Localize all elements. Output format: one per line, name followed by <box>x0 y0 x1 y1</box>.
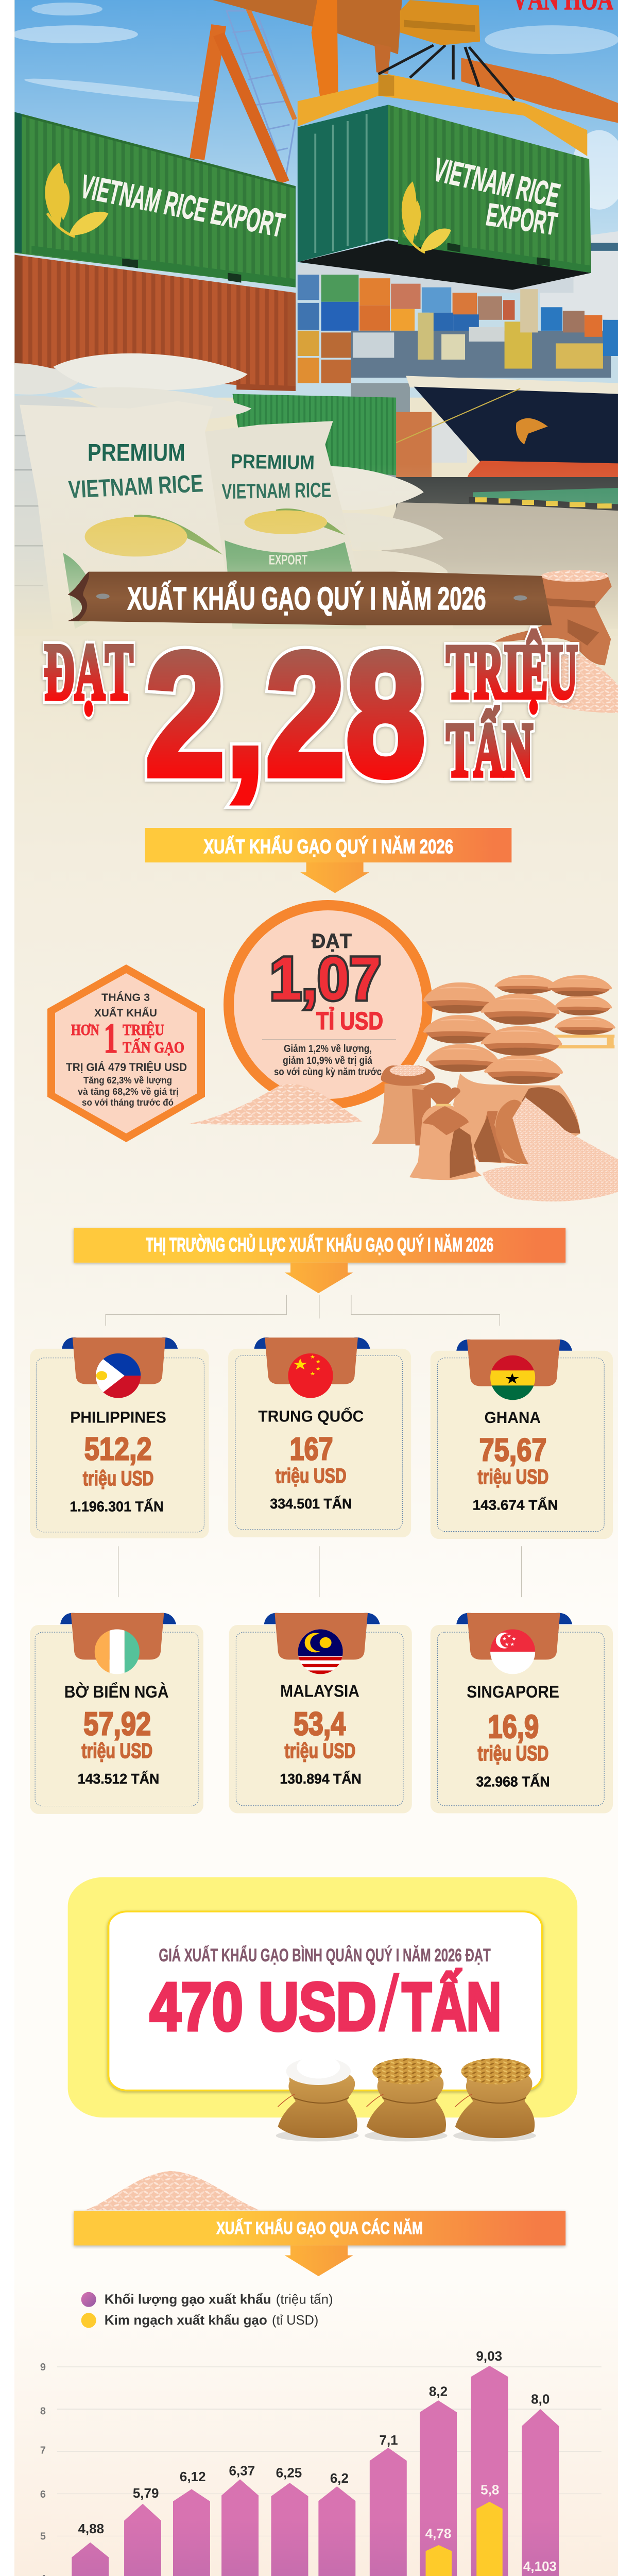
tied sack <box>409 1104 482 1180</box>
icon: gold rice leaf <box>402 181 451 252</box>
container stack left <box>14 112 296 391</box>
flag: Singapore: ★ <box>505 1642 509 1648</box>
bar chart: 9 <box>40 2362 46 2373</box>
circle: value 1.07 billion USD: TỈ USD <box>316 1007 383 1035</box>
big number headline: 2,28 <box>145 616 426 812</box>
card: Philippines: triệu USD <box>83 1467 153 1490</box>
flag: Ghana <box>490 1355 535 1401</box>
hero photo: rice containers at port <box>12 0 618 629</box>
card: Singapore: triệu USD <box>478 1742 548 1766</box>
flag: Philippines <box>96 1353 141 1398</box>
bar chart: 6,37 <box>229 2463 255 2479</box>
card: Singapore: 16,9 <box>488 1708 539 1744</box>
card: Ivory Coast: 143.512 TẤN <box>78 1770 159 1787</box>
bar chart: 9,03 <box>476 2348 502 2364</box>
flag: Ivory Coast <box>95 1629 140 1674</box>
legend <box>81 2292 333 2328</box>
flag: Ghana: ★ <box>505 1370 520 1387</box>
section heading: yearly exports: XUẤT KHẨU GẠO QUA CÁC NĂM <box>216 2218 423 2238</box>
stacked sacks <box>423 975 615 1084</box>
section heading: key markets <box>74 1228 565 1293</box>
card: Philippines: PHILIPPINES <box>70 1409 166 1427</box>
card: Philippines: 1.196.301 TẤN <box>70 1498 164 1515</box>
flag: China <box>288 1353 333 1398</box>
markets section, row 1 <box>30 1228 613 1597</box>
card: China: triệu USD <box>276 1465 347 1487</box>
bar chart: 4,78 <box>425 2526 451 2541</box>
panel: average price: 470 USD <box>150 1969 376 2045</box>
hexagon: March exports: HƠN <box>71 1021 99 1039</box>
section heading: yearly exports <box>74 2211 565 2276</box>
legend: (triệu tấn) <box>276 2292 333 2307</box>
card: Ghana: 75,67 <box>479 1432 546 1468</box>
icon: rice sacks <box>276 2056 536 2141</box>
big number headline: ĐẠT <box>44 628 133 717</box>
circle: value 1.07 billion USD: so với cùng kỳ năm trước <box>274 1066 382 1078</box>
rice sack top right <box>494 570 618 713</box>
bag text: PREMIUM <box>88 438 185 466</box>
hexagon: March exports <box>47 964 205 1142</box>
big number headline: 2,28 <box>145 616 426 812</box>
card: Malaysia: triệu USD <box>285 1739 355 1763</box>
circle: value 1.07 billion USD <box>224 900 433 1109</box>
card: Ghana: triệu USD <box>478 1466 548 1488</box>
headline section <box>44 570 618 893</box>
bar chart: 6,12 <box>180 2469 206 2484</box>
legend: Khối lượng gạo xuất khẩu <box>105 2292 271 2307</box>
pallet <box>555 1035 614 1048</box>
rice bags: NET 50 KG <box>130 591 177 608</box>
container text: VIETNAM RICE EXPORT <box>77 168 288 244</box>
markets section, row 2 and price <box>30 1613 613 2141</box>
panel: average price <box>68 1877 577 2117</box>
card: Malaysia <box>229 1613 412 1813</box>
small open sack <box>372 1083 429 1144</box>
bar chart: 5 <box>40 2531 46 2542</box>
card: Singapore <box>431 1613 613 1813</box>
rice pile <box>483 1097 618 1201</box>
bar chart: 5,8 <box>480 2482 499 2497</box>
hero fade <box>14 464 618 636</box>
card: Ivory Coast: triệu USD <box>81 1739 152 1763</box>
rice pile under circle <box>187 1084 363 1125</box>
flag: Singapore: ★ <box>502 1637 507 1642</box>
flag: Singapore <box>490 1629 535 1674</box>
card: Ghana: GHANA <box>485 1409 541 1427</box>
rice bags: EXPORT <box>269 552 307 567</box>
card: Ghana: 143.674 TẤN <box>473 1497 558 1513</box>
banner: wood <box>68 572 552 625</box>
flag: China: ★ <box>315 1359 321 1365</box>
card: China: TRUNG QUỐC <box>258 1407 364 1426</box>
rice bags: VIETNAM RICE <box>67 469 204 503</box>
card: China <box>228 1337 411 1537</box>
bar chart: 8,2 <box>429 2384 448 2399</box>
flag: China: ★ <box>310 1371 316 1377</box>
card: Singapore: 32.968 TẤN <box>476 1773 550 1790</box>
flag: Malaysia <box>298 1629 343 1674</box>
card: Malaysia: 53,4 <box>294 1705 346 1742</box>
hexagon: March exports: TẤN GẠO <box>123 1038 184 1056</box>
legend: (tỉ USD) <box>272 2312 318 2328</box>
panel: average price: TẤN <box>402 1969 501 2045</box>
bar chart: 5,79 <box>133 2485 159 2501</box>
card: Ivory Coast: 57,92 <box>83 1705 151 1742</box>
circle: value 1.07 billion USD: giảm 10,9% về trị giá <box>283 1055 373 1066</box>
open big sack <box>453 1073 580 1164</box>
legend: Kim ngạch xuất khẩu gạo <box>105 2312 267 2328</box>
bar chart: 4,88 <box>78 2521 104 2536</box>
bar chart: 6,2 <box>330 2470 349 2486</box>
card: Philippines <box>30 1337 209 1538</box>
hexagon: March exports: và tăng 68,2% về giá trị <box>78 1087 179 1097</box>
rice bags: PREMIUM <box>231 450 315 474</box>
hexagon: March exports: TRIỆU <box>123 1021 164 1039</box>
card: China: 334.501 TẤN <box>270 1496 352 1512</box>
hexagon: March exports: 1 <box>104 1014 118 1062</box>
rice bags: VIETNAM RICE <box>221 478 332 504</box>
section heading: Q1 exports: XUẤT KHẨU GẠO QUÝ I NĂM 2026 <box>204 835 453 857</box>
bar chart: 7 <box>40 2445 46 2456</box>
card: Philippines: 512,2 <box>84 1431 152 1467</box>
crane <box>197 0 618 182</box>
card: Ghana <box>431 1340 613 1539</box>
hexagon: March exports: THÁNG 3 <box>101 992 150 1004</box>
card: Ivory Coast: BỜ BIỂN NGÀ <box>64 1682 169 1702</box>
circle: value 1.07 billion USD: Giảm 1,2% về lượng, <box>284 1043 372 1055</box>
card: China: 167 <box>289 1431 333 1467</box>
flag: Singapore: ★ <box>511 1637 516 1642</box>
flag: Singapore: ★ <box>507 1634 511 1639</box>
bar chart: 8 <box>40 2406 46 2417</box>
hexagon: March exports: XUẤT KHẨU <box>94 1007 157 1019</box>
flag: China: ★ <box>292 1355 308 1373</box>
panel: average price: / <box>379 1958 400 2048</box>
bar chart: 4,103 <box>523 2558 557 2574</box>
chart section <box>40 2171 611 2576</box>
background containers and ship <box>298 231 618 629</box>
hexagon: March exports: TRỊ GIÁ 479 TRIỆU USD <box>66 1061 187 1074</box>
rice bags <box>14 353 453 629</box>
bar chart <box>40 2348 611 2576</box>
flag: China: ★ <box>315 1366 321 1372</box>
bar chart: 6 <box>40 2489 46 2500</box>
circle: value 1.07 billion USD: ĐẠT <box>312 930 352 953</box>
card: Malaysia: 130.894 TẤN <box>280 1770 362 1787</box>
card: Ivory Coast <box>30 1613 203 1814</box>
bar chart: 8,0 <box>531 2391 550 2406</box>
card: Malaysia: MALAYSIA <box>280 1682 359 1701</box>
section heading: Q1 exports <box>145 828 511 893</box>
bar chart: 7,1 <box>379 2432 398 2448</box>
hexagon: March exports: Tăng 62,3% về lượng <box>83 1075 172 1086</box>
big number headline: ĐẠT <box>44 628 133 717</box>
bar chart: 6,25 <box>276 2465 302 2480</box>
rice pile above heading <box>85 2171 260 2210</box>
card: Singapore: SINGAPORE <box>467 1683 559 1702</box>
hexagon: March exports: so với tháng trước đó <box>82 1097 174 1108</box>
flag: China: ★ <box>310 1354 316 1360</box>
icon: gold rice leaf <box>45 163 108 236</box>
circle: value 1.07 billion USD: 1,07 <box>270 945 381 1013</box>
sacks and rice illustration <box>372 975 618 1201</box>
flag: Singapore: ★ <box>510 1642 514 1648</box>
hanging container <box>298 0 591 290</box>
